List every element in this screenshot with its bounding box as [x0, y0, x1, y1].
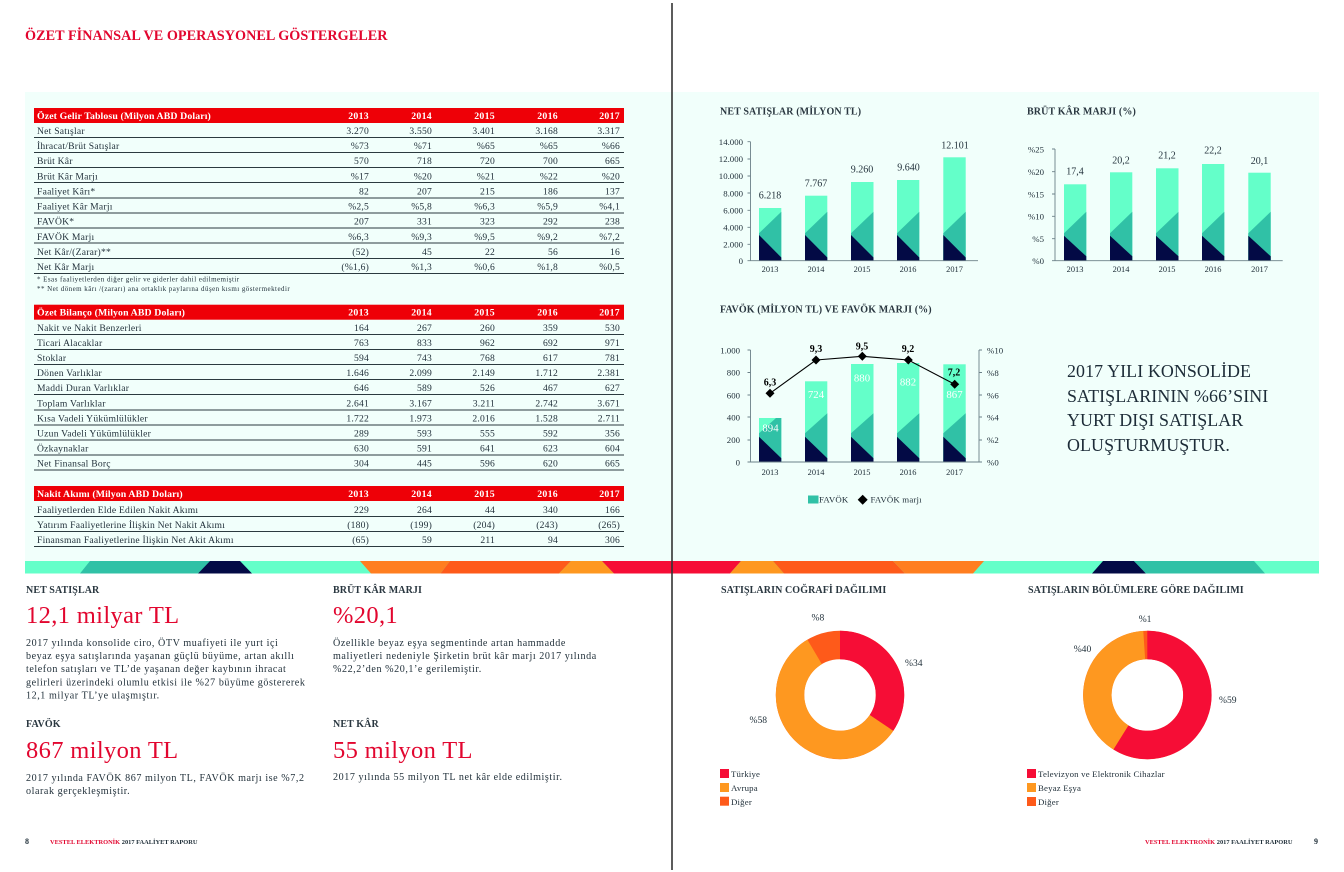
table: özet bilanço: 1.712: [535, 368, 558, 379]
table: özet gelir tablosu: (%1,6): [341, 262, 369, 273]
text block: net satışlar: telefon satışları ve TL’de yaşanan değer kaybının ihracat: [26, 664, 286, 675]
table: özet gelir tablosu: %2,5: [348, 202, 369, 212]
chart: net satışlar: 2013: [762, 265, 778, 274]
text block: brüt kâr marjı: %20,1: [333, 602, 398, 629]
table: özet gelir tablosu: İhracat/Brüt Satışlar: [37, 140, 120, 152]
chart: net satışlar: NET SATIŞLAR (MİLYON TL): [720, 106, 861, 118]
chart: net satışlar: 14.000: [719, 137, 744, 147]
chart: satışların bölümlere göre dağılımı: %1: [1139, 614, 1152, 625]
table: özet gelir tablosu: Brüt Kâr Marjı: [37, 172, 98, 182]
chart: brüt kâr marjı: 21,2: [1158, 150, 1176, 162]
chart: net satışlar: 12.101: [941, 140, 969, 152]
text block: net kâr: [333, 718, 563, 783]
table: nakit akımı: Faaliyetlerden Elde Edilen Nakit Akımı: [37, 505, 198, 516]
table: özet bilanço: 2015: [474, 308, 495, 318]
chart: favök ve favök marjı: 400: [727, 412, 741, 422]
chart: favök ve favök marjı: %8: [987, 368, 999, 378]
chart: brüt kâr marjı: %10: [1028, 212, 1045, 222]
table: nakit akımı: Yatırım Faaliyetlerine İlişkin Net Nakit Akımı: [37, 519, 225, 531]
table: özet bilanço: Kısa Vadeli Yükümlülükler: [37, 414, 148, 424]
text block: net satışlar: 2017 yılında konsolide ciro, ÖTV muafiyeti ile yurt içi: [26, 637, 278, 649]
chart: favök ve favök marjı: 2013: [762, 468, 778, 477]
chart: favök ve favök marjı: 2015: [854, 468, 870, 477]
table: özet gelir tablosu: %9,5: [474, 232, 495, 243]
chart: net satışlar: 6.000: [723, 206, 744, 216]
table: özet bilanço: 646: [354, 383, 369, 394]
table: nakit akımı: (243): [536, 520, 558, 531]
chart: net satışlar: 2016: [900, 265, 916, 274]
chart: favök ve favök marjı: 2017: [946, 468, 963, 477]
table: nakit akımı: 59: [422, 535, 432, 546]
chart: net satışlar: 0: [739, 256, 744, 266]
table: özet bilanço: 2.099: [409, 368, 432, 379]
chart: satışların coğrafi dağılımı: %58: [750, 715, 767, 726]
table: özet gelir tablosu: * Esas faaliyetlerden diğer gelir ve giderler dahil edilmemiştir: [37, 276, 240, 284]
chart: satışların coğrafi dağılımı: [720, 583, 923, 807]
chart: favök ve favök marjı: [720, 302, 1004, 505]
chart: favök ve favök marjı: 894: [762, 422, 779, 434]
text block: favök: [26, 717, 305, 797]
title: ÖZET FİNANSAL VE OPERASYONEL GÖSTERGELER: [25, 27, 388, 44]
chart: satışların coğrafi dağılımı: %8: [812, 612, 824, 624]
table: özet bilanço: 2.711: [598, 414, 620, 424]
table: özet bilanço: 594: [354, 353, 369, 364]
chart: favök ve favök marjı: 6,3: [764, 378, 776, 389]
table: nakit akımı: 229: [354, 505, 369, 516]
table: özet gelir tablosu: 2013: [348, 111, 369, 122]
text block: brüt kâr marjı: [333, 583, 597, 675]
text block: brüt kâr marjı: %22,2’den %20,1’e gerilemiştir.: [333, 664, 482, 675]
table: özet bilanço: Toplam Varlıklar: [37, 398, 106, 410]
table: özet gelir tablosu: Özet Gelir Tablosu (Milyon ABD Doları): [37, 109, 211, 122]
callout: yurt dışı satışlar: [1067, 361, 1268, 455]
table: özet gelir tablosu: %22: [540, 172, 558, 182]
chart: favök ve favök marjı: 9,3: [810, 344, 822, 355]
table: özet gelir tablosu: %1,8: [537, 262, 558, 273]
table: özet bilanço: 2017: [599, 308, 620, 318]
table: nakit akımı: 94: [548, 535, 558, 546]
table: nakit akımı: 166: [605, 505, 620, 516]
text block: favök: 867 milyon TL: [26, 737, 178, 764]
table: nakit akımı: 340: [543, 505, 558, 516]
table: özet gelir tablosu: 16: [610, 247, 620, 258]
decorative colour band right: [672, 561, 1319, 574]
chart: satışların bölümlere göre dağılımı: %59: [1219, 695, 1237, 706]
table: özet gelir tablosu: %0,5: [599, 262, 620, 273]
table: özet bilanço: 2014: [411, 308, 432, 318]
table: özet gelir tablosu: %20: [414, 172, 432, 182]
table: özet gelir tablosu: [34, 108, 624, 293]
table: nakit akımı: 2015: [474, 489, 495, 500]
text block: net satışlar: NET SATIŞLAR: [26, 585, 100, 596]
table: özet gelir tablosu: 137: [605, 186, 620, 198]
table: özet bilanço: 304: [354, 458, 369, 470]
table: özet gelir tablosu: %1,3: [411, 262, 432, 273]
text block: favök: FAVÖK: [26, 717, 61, 730]
table: özet gelir tablosu: Faaliyet Kârı*: [37, 186, 95, 198]
chart: favök ve favök marjı: 9,5: [856, 342, 868, 352]
table: özet gelir tablosu: 238: [605, 216, 620, 228]
table: özet gelir tablosu: %21: [477, 172, 495, 182]
chart: favök ve favök marjı: 867: [946, 389, 963, 401]
table: özet bilanço: 3.211: [473, 398, 495, 410]
table: özet bilanço: 2.016: [472, 414, 495, 424]
table: özet gelir tablosu: 2017: [599, 111, 620, 122]
footer right: [1145, 837, 1318, 846]
table: özet gelir tablosu: 22: [485, 247, 495, 258]
chart: favök ve favök marjı: 882: [900, 376, 916, 388]
chart: net satışlar: 2015: [854, 265, 870, 274]
chart: satışların coğrafi dağılımı: SATIŞLARIN COĞRAFİ DAĞILIMI: [721, 583, 886, 596]
table: özet gelir tablosu: %9,3: [411, 232, 432, 243]
chart: brüt kâr marjı: 20,2: [1112, 156, 1130, 166]
chart: net satışlar: 10.000: [719, 171, 744, 181]
table: özet gelir tablosu: 3.270: [346, 126, 369, 137]
table: özet bilanço: 589: [417, 383, 432, 394]
table: özet gelir tablosu: FAVÖK*: [37, 216, 74, 228]
table: özet bilanço: [34, 305, 624, 470]
table: nakit akımı: 2013: [348, 489, 369, 500]
table: özet bilanço: 604: [605, 444, 620, 454]
table: nakit akımı: 306: [605, 535, 620, 546]
table: nakit akımı: Finansman Faaliyetlerine İlişkin Net Akit Akımı: [37, 534, 234, 546]
table: özet bilanço: 530: [605, 323, 620, 334]
callout: yurt dışı satışlar: SATIŞLARININ %66’SINI: [1067, 386, 1268, 406]
chart: satışların bölümlere göre dağılımı: SATIŞLARIN BÖLÜMLERE GÖRE DAĞILIMI: [1028, 583, 1244, 596]
table: özet bilanço: Nakit ve Nakit Benzerleri: [37, 323, 142, 334]
table: özet gelir tablosu: %65: [477, 141, 495, 152]
chart: favök ve favök marjı: FAVÖK (MİLYON TL) VE FAVÖK MARJI (%): [720, 302, 932, 316]
table: özet bilanço: 445: [417, 458, 432, 470]
chart: brüt kâr marjı: 2016: [1205, 265, 1221, 274]
table: nakit akımı: 44: [485, 505, 495, 516]
chart: brüt kâr marjı: 2014: [1113, 265, 1130, 274]
table: özet gelir tablosu: 207: [417, 186, 432, 198]
table: özet gelir tablosu: 3.317: [597, 126, 620, 137]
table: özet bilanço: Özkaynaklar: [37, 442, 89, 454]
footer left: VESTEL ELEKTRONİK 2017 FAALİYET RAPORU: [50, 839, 198, 846]
chart: favök ve favök marjı: 9,2: [902, 344, 914, 355]
table: özet gelir tablosu: %66: [602, 141, 620, 152]
chart: net satışlar: 4.000: [723, 222, 744, 232]
table: özet gelir tablosu: 207: [354, 216, 369, 228]
chart: favök ve favök marjı: %2: [987, 435, 999, 445]
table: özet bilanço: 260: [480, 323, 495, 334]
table: özet bilanço: 555: [480, 428, 495, 440]
chart: favök ve favök marjı: 2014: [808, 468, 825, 477]
chart: net satışlar: 2014: [808, 265, 825, 274]
chart: brüt kâr marjı: BRÜT KÂR MARJI (%): [1027, 104, 1136, 118]
text block: net satışlar: [26, 585, 306, 702]
table: özet gelir tablosu: 2015: [474, 111, 495, 122]
chart: favök ve favök marjı: %6: [987, 390, 999, 400]
table: özet bilanço: 593: [417, 428, 432, 440]
chart: favök ve favök marjı: %0: [987, 458, 999, 468]
chart: favök ve favök marjı: FAVÖK marjı: [870, 494, 922, 504]
chart: brüt kâr marjı: %5: [1032, 234, 1045, 244]
table: özet gelir tablosu: Net Kâr/(Zarar)**: [37, 247, 111, 258]
table: özet bilanço: 630: [354, 444, 369, 454]
table: özet bilanço: 620: [543, 458, 558, 470]
table: özet gelir tablosu: %0,6: [474, 262, 495, 273]
table: özet bilanço: 2.149: [472, 368, 495, 379]
table: özet bilanço: 356: [605, 428, 620, 440]
table: özet bilanço: 267: [417, 323, 432, 334]
chart: satışların coğrafi dağılımı: Diğer: [731, 797, 752, 807]
chart: favök ve favök marjı: 1.000: [720, 346, 741, 356]
table: nakit akımı: 2016: [537, 489, 558, 500]
table: özet bilanço: Ticari Alacaklar: [37, 338, 103, 349]
table: özet bilanço: 768: [480, 353, 495, 364]
chart: satışların bölümlere göre dağılımı: %40: [1074, 644, 1091, 655]
table: özet bilanço: 641: [480, 444, 495, 454]
table: özet gelir tablosu: 3.550: [409, 126, 432, 137]
chart: brüt kâr marjı: %20: [1028, 167, 1045, 177]
table: özet gelir tablosu: %6,3: [348, 232, 369, 243]
table: özet bilanço: Net Finansal Borç: [37, 458, 111, 470]
table: özet gelir tablosu: 292: [543, 216, 558, 228]
table: özet gelir tablosu: 570: [354, 156, 369, 167]
chart: favök ve favök marjı: 0: [736, 458, 741, 468]
table: özet bilanço: 1.646: [346, 368, 369, 379]
table: nakit akımı: (65): [352, 535, 369, 546]
table: özet bilanço: 665: [605, 458, 620, 470]
text block: net kâr: 2017 yılında 55 milyon TL net kâr elde edilmiştir.: [333, 772, 563, 783]
table: nakit akımı: 264: [417, 505, 432, 516]
table: nakit akımı: 211: [480, 535, 495, 546]
chart: net satışlar: [719, 106, 978, 274]
chart: favök ve favök marjı: 2016: [900, 468, 916, 477]
decorative colour band left: [25, 561, 672, 574]
table: özet gelir tablosu: %65: [540, 141, 558, 152]
table: özet bilanço: 596: [480, 458, 495, 470]
chart: brüt kâr marjı: 2017: [1251, 265, 1268, 274]
table: özet bilanço: 781: [605, 353, 620, 364]
chart: net satışlar: 8.000: [723, 188, 744, 198]
chart: net satışlar: 2017: [946, 265, 963, 274]
table: nakit akımı: (199): [410, 520, 432, 531]
table: özet bilanço: 692: [543, 338, 558, 349]
chart: satışların bölümlere göre dağılımı: Diğer: [1038, 797, 1059, 807]
chart: satışların bölümlere göre dağılımı: Televizyon ve Elektronik Cihazlar: [1038, 769, 1165, 779]
table: nakit akımı: (265): [598, 520, 620, 531]
chart: favök ve favök marjı: 200: [727, 435, 741, 445]
chart: brüt kâr marjı: 2013: [1067, 265, 1083, 274]
chart: brüt kâr marjı: %15: [1028, 190, 1045, 200]
table: nakit akımı: (180): [347, 520, 369, 531]
text block: net satışlar: 12,1 milyar TL’ye ulaşmıştır.: [26, 690, 160, 702]
table: özet bilanço: 743: [417, 353, 432, 364]
table: özet bilanço: 617: [543, 353, 558, 364]
callout: yurt dışı satışlar: OLUŞTURMUŞTUR.: [1067, 435, 1230, 455]
chart: favök ve favök marjı: 724: [808, 389, 825, 401]
table: özet bilanço: 2016: [537, 308, 558, 318]
table: özet bilanço: Stoklar: [37, 353, 67, 364]
table: özet gelir tablosu: (52): [352, 247, 369, 258]
table: özet bilanço: 833: [417, 338, 432, 349]
chart: satışların bölümlere göre dağılımı: Beyaz Eşya: [1038, 783, 1081, 793]
table: özet gelir tablosu: 3.401: [472, 126, 495, 137]
table: özet bilanço: 2.381: [597, 368, 620, 379]
table: özet gelir tablosu: FAVÖK Marjı: [37, 231, 94, 243]
table: özet gelir tablosu: %71: [414, 141, 432, 152]
table: özet gelir tablosu: Net Kâr Marjı: [37, 262, 94, 273]
chart: net satışlar: 7.767: [805, 178, 827, 190]
table: özet bilanço: 592: [543, 428, 558, 440]
chart: brüt kâr marjı: [1027, 104, 1283, 274]
table: nakit akımı: Nakit Akımı (Milyon ABD Doları): [37, 489, 183, 500]
table: özet bilanço: 627: [605, 383, 620, 394]
chart: brüt kâr marjı: 22,2: [1204, 146, 1222, 156]
table: özet gelir tablosu: 2016: [537, 111, 558, 122]
table: özet gelir tablosu: %20: [602, 172, 620, 182]
callout: yurt dışı satışlar: 2017 YILI KONSOLİDE: [1067, 361, 1251, 381]
chart: favök ve favök marjı: %10: [987, 346, 1004, 356]
chart: favök ve favök marjı: 880: [854, 372, 870, 384]
text block: brüt kâr marjı: BRÜT KÂR MARJI: [333, 583, 422, 596]
table: özet bilanço: 2.742: [535, 398, 558, 410]
table: özet gelir tablosu: 56: [548, 247, 558, 258]
chart: brüt kâr marjı: 17,4: [1066, 166, 1084, 178]
table: özet gelir tablosu: %6,3: [474, 202, 495, 212]
table: nakit akımı: 2017: [599, 489, 620, 500]
table: özet bilanço: Özet Bilanço (Milyon ABD Doları): [37, 306, 185, 318]
table: özet gelir tablosu: Faaliyet Kâr Marjı: [37, 202, 113, 212]
table: özet gelir tablosu: 215: [480, 186, 495, 198]
text block: brüt kâr marjı: Özellikle beyaz eşya segmentinde artan hammadde: [333, 637, 566, 649]
table: özet gelir tablosu: 2014: [411, 111, 432, 122]
chart: net satışlar: 9.260: [851, 164, 873, 176]
text block: net satışlar: 12,1 milyar TL: [26, 602, 179, 629]
footer left: [25, 837, 198, 846]
table: özet gelir tablosu: %73: [351, 141, 369, 152]
table: özet gelir tablosu: 665: [605, 156, 620, 167]
table: özet gelir tablosu: %7,2: [599, 232, 620, 243]
table: özet bilanço: 1.528: [535, 414, 558, 424]
chart: net satışlar: 2.000: [723, 240, 744, 250]
footer right: VESTEL ELEKTRONİK 2017 FAALİYET RAPORU: [1145, 839, 1293, 846]
table: özet gelir tablosu: Brüt Kâr: [37, 156, 73, 167]
chart: satışların coğrafi dağılımı: Avrupa: [731, 783, 758, 793]
text block: net kâr: 55 milyon TL: [333, 737, 473, 764]
table: özet gelir tablosu: 186: [543, 186, 558, 198]
chart: net satışlar: 6.218: [759, 190, 781, 202]
table: özet bilanço: 763: [354, 338, 369, 349]
table: nakit akımı: (204): [473, 520, 495, 531]
table: nakit akımı: 2014: [411, 489, 432, 500]
table: özet bilanço: Maddi Duran Varlıklar: [37, 383, 130, 394]
table: özet bilanço: 591: [417, 444, 432, 454]
table: özet gelir tablosu: 323: [480, 216, 495, 228]
chart: net satışlar: 9.640: [897, 162, 920, 174]
table: özet bilanço: 359: [543, 323, 558, 334]
chart: brüt kâr marjı: %0: [1032, 256, 1045, 266]
table: özet bilanço: 962: [480, 338, 495, 349]
table: özet bilanço: Uzun Vadeli Yükümlülükler: [37, 428, 152, 440]
chart: favök ve favök marjı: %4: [987, 412, 999, 422]
text block: favök: olarak gerçekleşmiştir.: [26, 786, 130, 797]
table: özet gelir tablosu: %4,1: [599, 202, 620, 212]
footer left: 8: [25, 837, 29, 846]
table: özet bilanço: 467: [543, 383, 558, 394]
table: özet gelir tablosu: 700: [543, 156, 558, 167]
chart: brüt kâr marjı: 2015: [1159, 265, 1175, 274]
table: özet gelir tablosu: %5,9: [537, 202, 558, 212]
panel: mint background: [25, 92, 1319, 561]
table: özet bilanço: 3.167: [409, 398, 432, 410]
table: nakit akımı: [34, 486, 624, 546]
footer right: 9: [1314, 837, 1318, 846]
table: özet bilanço: Dönen Varlıklar: [37, 368, 102, 379]
table: özet gelir tablosu: 720: [480, 156, 495, 167]
chart: satışların coğrafi dağılımı: Türkiye: [731, 769, 760, 779]
table: özet gelir tablosu: Net Satışlar: [37, 126, 85, 137]
chart: favök ve favök marjı: FAVÖK: [819, 494, 849, 504]
chart: brüt kâr marjı: %25: [1028, 144, 1045, 154]
table: özet bilanço: 2.641: [346, 398, 369, 410]
text block: net satışlar: gelirleri üzerindeki olumlu etkisi ile %27 büyüme göstererek: [26, 678, 306, 688]
table: özet bilanço: 2013: [348, 308, 369, 318]
table: özet bilanço: 526: [480, 383, 495, 394]
chart: satışların bölümlere göre dağılımı: [1027, 583, 1244, 807]
table: özet bilanço: 1.722: [346, 414, 369, 424]
table: özet bilanço: 164: [354, 323, 369, 334]
text block: favök: 2017 yılında FAVÖK 867 milyon TL, FAVÖK marjı ise %7,2: [26, 772, 305, 784]
table: özet bilanço: 971: [605, 338, 620, 349]
table: özet gelir tablosu: ** Net dönem kârı /(zararı) ana ortaklık paylarına düşen kısmı göstermektedir: [37, 285, 290, 293]
text block: net kâr: NET KÂR: [333, 718, 379, 730]
table: özet gelir tablosu: 718: [417, 156, 432, 167]
chart: net satışlar: 12.000: [719, 154, 744, 164]
table: özet bilanço: 623: [543, 444, 558, 454]
chart: brüt kâr marjı: 20,1: [1251, 156, 1268, 167]
table: özet bilanço: 1.973: [409, 414, 432, 424]
callout: yurt dışı satışlar: YURT DIŞI SATIŞLAR: [1067, 410, 1243, 430]
chart: satışların coğrafi dağılımı: %34: [905, 658, 923, 669]
table: özet bilanço: 289: [354, 428, 369, 440]
chart: favök ve favök marjı: 600: [727, 390, 741, 400]
table: özet bilanço: 3.671: [597, 398, 620, 410]
table: özet gelir tablosu: 45: [422, 247, 432, 258]
table: özet gelir tablosu: %9,2: [537, 232, 558, 243]
table: özet gelir tablosu: 3.168: [535, 126, 558, 137]
text block: brüt kâr marjı: maliyetleri nedeniyle Şirketin brüt kâr marjı 2017 yılında: [333, 651, 597, 662]
chart: favök ve favök marjı: 800: [727, 368, 741, 378]
table: özet gelir tablosu: %5,8: [411, 202, 432, 212]
table: özet gelir tablosu: %17: [351, 172, 369, 182]
table: özet gelir tablosu: 82: [359, 186, 369, 198]
table: özet gelir tablosu: 331: [417, 216, 432, 228]
chart: favök ve favök marjı: 7,2: [948, 368, 960, 378]
text block: net satışlar: beyaz eşya satışlarında yaşanan güçlü büyüme, artan akıllı: [26, 651, 294, 662]
